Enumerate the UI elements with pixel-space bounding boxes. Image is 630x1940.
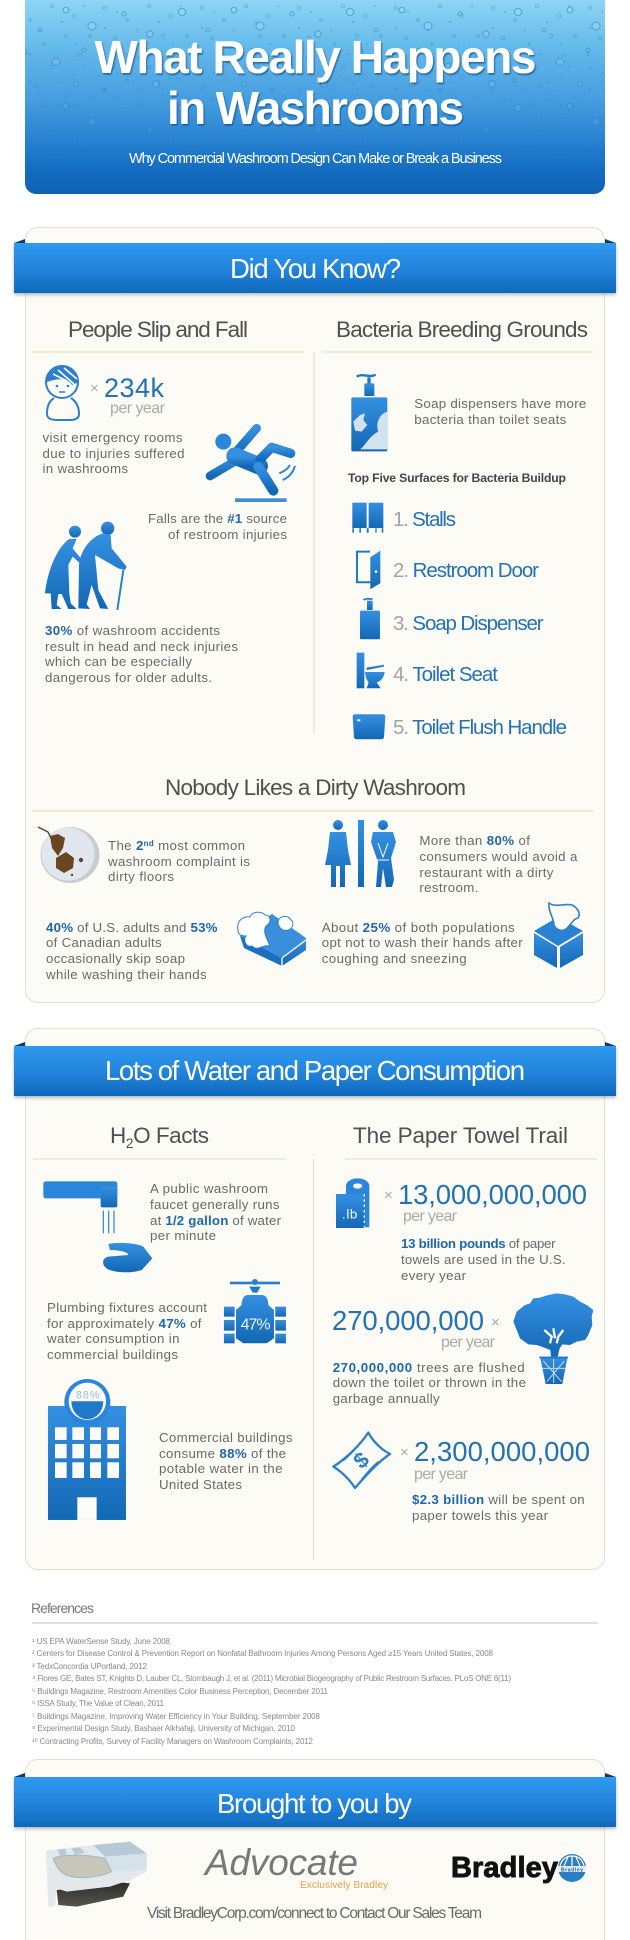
list item: stalls bbox=[352, 503, 456, 533]
stat: 2.3 billion: 2,300,000,000 bbox=[414, 1436, 590, 1467]
reference list bbox=[32, 1637, 511, 1746]
logo: advocate: Advocate bbox=[203, 1842, 358, 1883]
logo: advocate bbox=[203, 1842, 388, 1891]
icon: dirty floor bbox=[38, 827, 100, 883]
text: half gallon: at 1/2 gallon of water bbox=[150, 1213, 282, 1228]
logo: bradley: Bradley bbox=[451, 1852, 558, 1884]
icon: faucet and hand bbox=[43, 1181, 152, 1272]
icon: injured person bbox=[46, 366, 79, 420]
stat: 234k bbox=[90, 373, 166, 417]
logo: advocate: Exclusively Bradley bbox=[300, 1880, 388, 1891]
text: skip soap: occasionally skip soap bbox=[46, 951, 185, 966]
panel: water and paper consumption bbox=[14, 1028, 616, 1570]
reference list: ⁵ Buildings Magazine, Restroom Amenities Color Business Perception, December 2011 bbox=[32, 1687, 329, 1696]
text: emergency rooms: visit emergency rooms bbox=[42, 430, 183, 445]
text: emergency rooms: in washrooms bbox=[42, 461, 128, 476]
stat: 2.3 billion bbox=[400, 1436, 590, 1483]
icon: soap bar with foam bbox=[238, 912, 306, 966]
text: second most common complaint: nd bbox=[144, 839, 154, 848]
reference list: ⁸ Experimental Design Study, Bashaer Alkhafaji, University of Michigan, 2010 bbox=[32, 1724, 296, 1733]
icon: older adults bbox=[45, 522, 127, 610]
text: half gallon: per minute bbox=[150, 1228, 216, 1243]
section: h2o facts bbox=[43, 1123, 293, 1520]
text: plumbing fixtures: for approximately 47% of bbox=[47, 1316, 202, 1331]
text: 13 billion pounds bbox=[401, 1236, 566, 1283]
reference list: ⁶ ISSA Study, The Value of Clean, 2011 bbox=[32, 1699, 165, 1708]
stat: 13 billion: per year bbox=[403, 1208, 458, 1225]
section: nobody likes a dirty washroom bbox=[38, 775, 583, 982]
text: 2.3 billion spent bbox=[412, 1492, 585, 1523]
text: opt not to wash: coughing and sneezing bbox=[322, 951, 467, 966]
text: head and neck injuries: 30% of washroom accidents bbox=[45, 623, 220, 638]
stat: 270 million: 270,000,000 bbox=[332, 1305, 484, 1336]
reference list: ² Centers for Disease Control & Prevention Report on Nonfatal Bathroom Injuries Among Persons Aged ≥15 Years United States, 2008 bbox=[32, 1649, 494, 1658]
heading: 2 bbox=[126, 1135, 134, 1151]
heading: The Paper Towel Trail bbox=[353, 1123, 568, 1148]
text: 270 million trees: garbage annually bbox=[333, 1391, 440, 1406]
icon: paper towel roll bbox=[336, 1178, 369, 1228]
text: number one source bbox=[148, 511, 287, 542]
text: head and neck injuries: dangerous for older adults. bbox=[45, 670, 212, 685]
icon: valve bbox=[224, 1279, 286, 1343]
stat: 234k: × bbox=[90, 380, 99, 397]
text: plumbing fixtures: Plumbing fixtures account bbox=[47, 1300, 207, 1315]
text: skip soap: of Canadian adults bbox=[46, 935, 162, 950]
stat: 234k: 234k bbox=[104, 373, 164, 403]
icon: dollar bill bbox=[333, 1433, 390, 1488]
text: potable water: potable water in the bbox=[159, 1461, 282, 1476]
contact line: Visit BradleyCorp.com/connect to Contact Our Sales Team bbox=[147, 1905, 482, 1922]
text: half gallon: faucet generally runs bbox=[150, 1197, 280, 1212]
section: people slip and fall bbox=[42, 317, 295, 685]
reference list: ⁷ Buildings Magazine, Improving Water Efficiency in Your Building, September 2008 bbox=[32, 1712, 321, 1721]
title bbox=[94, 31, 536, 134]
stat: 234k: per year bbox=[110, 400, 166, 417]
text: second most common complaint: most common bbox=[154, 838, 245, 853]
text: skip soap: 40% of U.S. adults and 53% bbox=[46, 920, 218, 935]
text: plumbing fixtures: commercial buildings bbox=[47, 1347, 178, 1362]
stat: 13 billion: 13,000,000,000 bbox=[398, 1179, 587, 1210]
heading: references: References bbox=[31, 1600, 94, 1616]
panel: did you know bbox=[14, 228, 616, 1002]
product photo: sink bbox=[46, 1842, 147, 1907]
icon: valve: 47% bbox=[241, 1316, 271, 1333]
icon: building bbox=[48, 1379, 126, 1520]
text: 270 million trees: down the toilet or thrown in the bbox=[333, 1375, 526, 1390]
heading: O Facts bbox=[133, 1123, 209, 1148]
text: avoid a restaurant bbox=[419, 833, 578, 895]
heading: Nobody Likes a Dirty Washroom bbox=[165, 775, 466, 800]
icon: falling person bbox=[210, 428, 295, 502]
icon: paper towel roll: .lb bbox=[342, 1207, 357, 1222]
title: in Washrooms bbox=[167, 82, 464, 134]
text: emergency rooms bbox=[42, 430, 184, 476]
stat: 270 million bbox=[332, 1305, 500, 1351]
text: opt not to wash: About 25% of both populations bbox=[322, 920, 515, 935]
list item: toilet seat bbox=[357, 653, 498, 688]
list item: soap dispenser: 3. Soap Dispenser bbox=[393, 612, 544, 635]
stat: 13 billion bbox=[384, 1179, 587, 1225]
stat: 2.3 billion: per year bbox=[414, 1466, 469, 1483]
text: skip soap bbox=[45, 920, 218, 982]
list item: restroom door: 2. Restroom Door bbox=[393, 559, 539, 582]
ribbon: did you know: Did You Know? bbox=[230, 253, 401, 284]
text: opt not to wash: opt not to wash their hands after bbox=[322, 935, 523, 950]
panel: brought to you by bbox=[14, 1760, 616, 1940]
text: head and neck injuries bbox=[44, 623, 238, 685]
text: potable water: consume 88% of the bbox=[159, 1446, 286, 1461]
references bbox=[31, 1600, 598, 1746]
stat: 2.3 billion: × bbox=[400, 1444, 409, 1461]
list item: stalls: 1. Stalls bbox=[393, 508, 456, 531]
text: second most common complaint: washroom complaint is bbox=[107, 854, 250, 869]
stat: 270 million: × bbox=[491, 1314, 500, 1331]
icon: building: 88% bbox=[76, 1389, 100, 1401]
text: 2.3 billion spent: paper towels this year bbox=[412, 1508, 549, 1523]
text: skip soap: while washing their hands bbox=[45, 967, 207, 982]
stat: 270 million: per year bbox=[441, 1334, 496, 1351]
text: plumbing fixtures: water consumption in bbox=[46, 1331, 180, 1346]
icon: restroom figures bbox=[325, 820, 396, 887]
list item: toilet seat: 4. Toilet Seat bbox=[393, 663, 498, 686]
text: potable water bbox=[159, 1430, 293, 1492]
text: 13 billion pounds: 13 billion pounds of paper bbox=[401, 1236, 556, 1251]
subtitle: Why Commercial Washroom Design Can Make or Break a Business bbox=[129, 151, 502, 167]
text: potable water: Commercial buildings bbox=[159, 1430, 293, 1445]
icon: soap dispenser with bacteria bbox=[351, 375, 387, 451]
panel: hero header bbox=[25, 0, 605, 194]
heading: Bacteria Breeding Grounds bbox=[336, 317, 588, 342]
text: 270 million trees: 270,000,000 trees are flushed bbox=[333, 1360, 525, 1375]
logo: bradley: Bradley bbox=[561, 1868, 583, 1874]
reference list: ³ TedxConcordia UPortland, 2012 bbox=[32, 1662, 148, 1671]
list item: toilet flush handle: 5. Toilet Flush Handle bbox=[393, 716, 567, 739]
ribbon: did you know bbox=[14, 239, 616, 293]
ribbon: brought to you by bbox=[14, 1773, 616, 1827]
text: plumbing fixtures bbox=[46, 1300, 207, 1362]
text: half gallon: A public washroom bbox=[150, 1181, 268, 1196]
text: soap dispensers: Soap dispensers have more bbox=[414, 396, 586, 411]
reference list: ⁴ Flores GE, Bates ST, Knights D, Lauber CL, Stombaugh J, et al. (2011) Microbial Biogeography of Public Restroom Surfaces. PLoS ONE 6(11) bbox=[32, 1674, 511, 1683]
text: number one source: of restroom injuries bbox=[168, 527, 287, 542]
text: 13 billion pounds: towels are used in the U.S. bbox=[401, 1252, 566, 1267]
stat: 13 billion: × bbox=[384, 1187, 393, 1204]
text: soap dispensers bbox=[414, 396, 586, 427]
text: emergency rooms: due to injuries suffered bbox=[42, 446, 184, 461]
text: avoid a restaurant: consumers would avoid a bbox=[419, 849, 578, 864]
reference list: ¹⁰ Contracting Profits, Survey of Facility Managers on Washroom Complaints, 2012 bbox=[32, 1737, 314, 1746]
ribbon: water and paper: Lots of Water and Paper Consumption bbox=[105, 1055, 525, 1086]
text: head and neck injuries: which can be especially bbox=[44, 654, 192, 669]
list item: restroom door bbox=[357, 551, 539, 589]
subheading: top five surfaces: Top Five Surfaces for Bacteria Buildup bbox=[348, 471, 566, 485]
section: bacteria breeding grounds bbox=[336, 317, 588, 739]
text: avoid a restaurant: restroom. bbox=[419, 880, 478, 895]
title: What Really Happens bbox=[94, 31, 536, 83]
heading: People Slip and Fall bbox=[68, 317, 248, 342]
list item: soap dispenser bbox=[360, 599, 544, 639]
icon: tree in basket bbox=[513, 1293, 593, 1384]
text: avoid a restaurant: restaurant with a dirty bbox=[419, 865, 554, 880]
text: opt not to wash bbox=[322, 920, 523, 966]
reference list: ¹ US EPA WaterSense Study, June 2008 bbox=[32, 1637, 171, 1646]
icon: dollar bill: $ bbox=[348, 1447, 374, 1474]
text: avoid a restaurant: More than 80% of bbox=[419, 833, 530, 848]
text: soap dispensers: bacteria than toilet seats bbox=[414, 412, 567, 427]
text: second most common complaint: dirty floors bbox=[108, 869, 174, 884]
text: 270 million trees bbox=[333, 1360, 526, 1406]
text: head and neck injuries: result in head and neck injuries bbox=[45, 639, 238, 654]
text: second most common complaint bbox=[107, 838, 250, 884]
text: half gallon bbox=[150, 1181, 282, 1243]
text: 2.3 billion spent: $2.3 billion will be spent on bbox=[412, 1492, 585, 1507]
text: potable water: United States bbox=[159, 1477, 242, 1492]
ribbon: water and paper bbox=[14, 1042, 616, 1096]
text: 13 billion pounds: every year bbox=[401, 1268, 467, 1283]
text: second most common complaint: The 2 bbox=[108, 838, 143, 853]
icon: tissue box bbox=[534, 903, 583, 968]
section: the paper towel trail bbox=[332, 1123, 593, 1523]
heading: H bbox=[110, 1123, 126, 1148]
text: number one source: Falls are the #1 source bbox=[148, 511, 287, 526]
column dividers bbox=[32, 352, 594, 811]
ribbon: brought to you by: Brought to you by bbox=[217, 1788, 412, 1819]
